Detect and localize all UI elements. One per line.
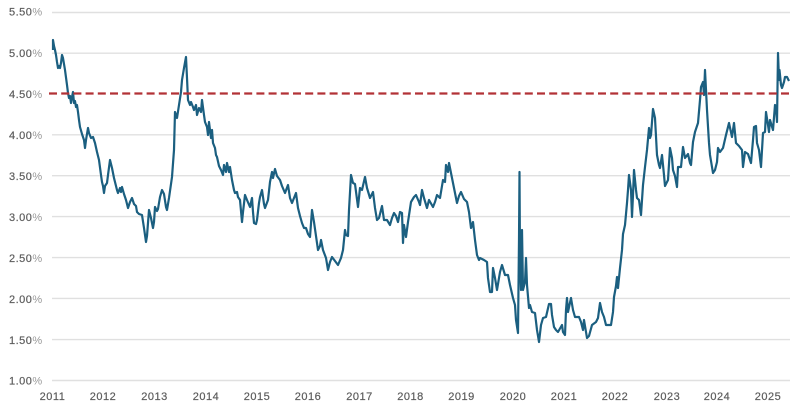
x-axis labels: 2024 <box>704 391 730 403</box>
x-axis labels: 2015 <box>244 391 270 403</box>
y-axis labels: 4.00% <box>9 130 43 142</box>
x-axis labels: 2023 <box>654 391 680 403</box>
y-axis labels: 1.50% <box>9 335 43 347</box>
x-axis labels: 2025 <box>755 391 781 403</box>
x-axis labels: 2011 <box>40 391 65 403</box>
x-axis labels: 2014 <box>193 391 219 403</box>
4.50% dashed reference line <box>49 92 790 95</box>
y-axis labels: 3.00% <box>9 212 43 224</box>
x-axis labels: 2017 <box>346 391 373 403</box>
yield line series <box>53 40 789 342</box>
x-axis labels: 2018 <box>397 391 424 403</box>
y-axis labels: 4.50% <box>9 89 43 101</box>
x-axis labels: 2012 <box>90 391 116 403</box>
x-axis labels: 2013 <box>141 391 168 403</box>
y-axis labels: 5.50% <box>9 6 43 18</box>
x-axis labels: 2021 <box>551 391 577 403</box>
x-axis labels: 2022 <box>602 391 628 403</box>
y-axis labels: 1.00% <box>9 376 43 388</box>
x-axis labels: 2020 <box>500 391 526 403</box>
x-axis labels: 2016 <box>295 391 321 403</box>
y-axis labels: 2.50% <box>9 253 43 265</box>
y-axis labels: 3.50% <box>9 171 43 183</box>
x-axis labels <box>40 391 781 403</box>
x-axis labels: 2019 <box>448 391 475 403</box>
y-axis labels <box>9 6 43 388</box>
y-axis labels: 2.00% <box>9 294 43 306</box>
y-axis labels: 5.00% <box>9 48 43 60</box>
